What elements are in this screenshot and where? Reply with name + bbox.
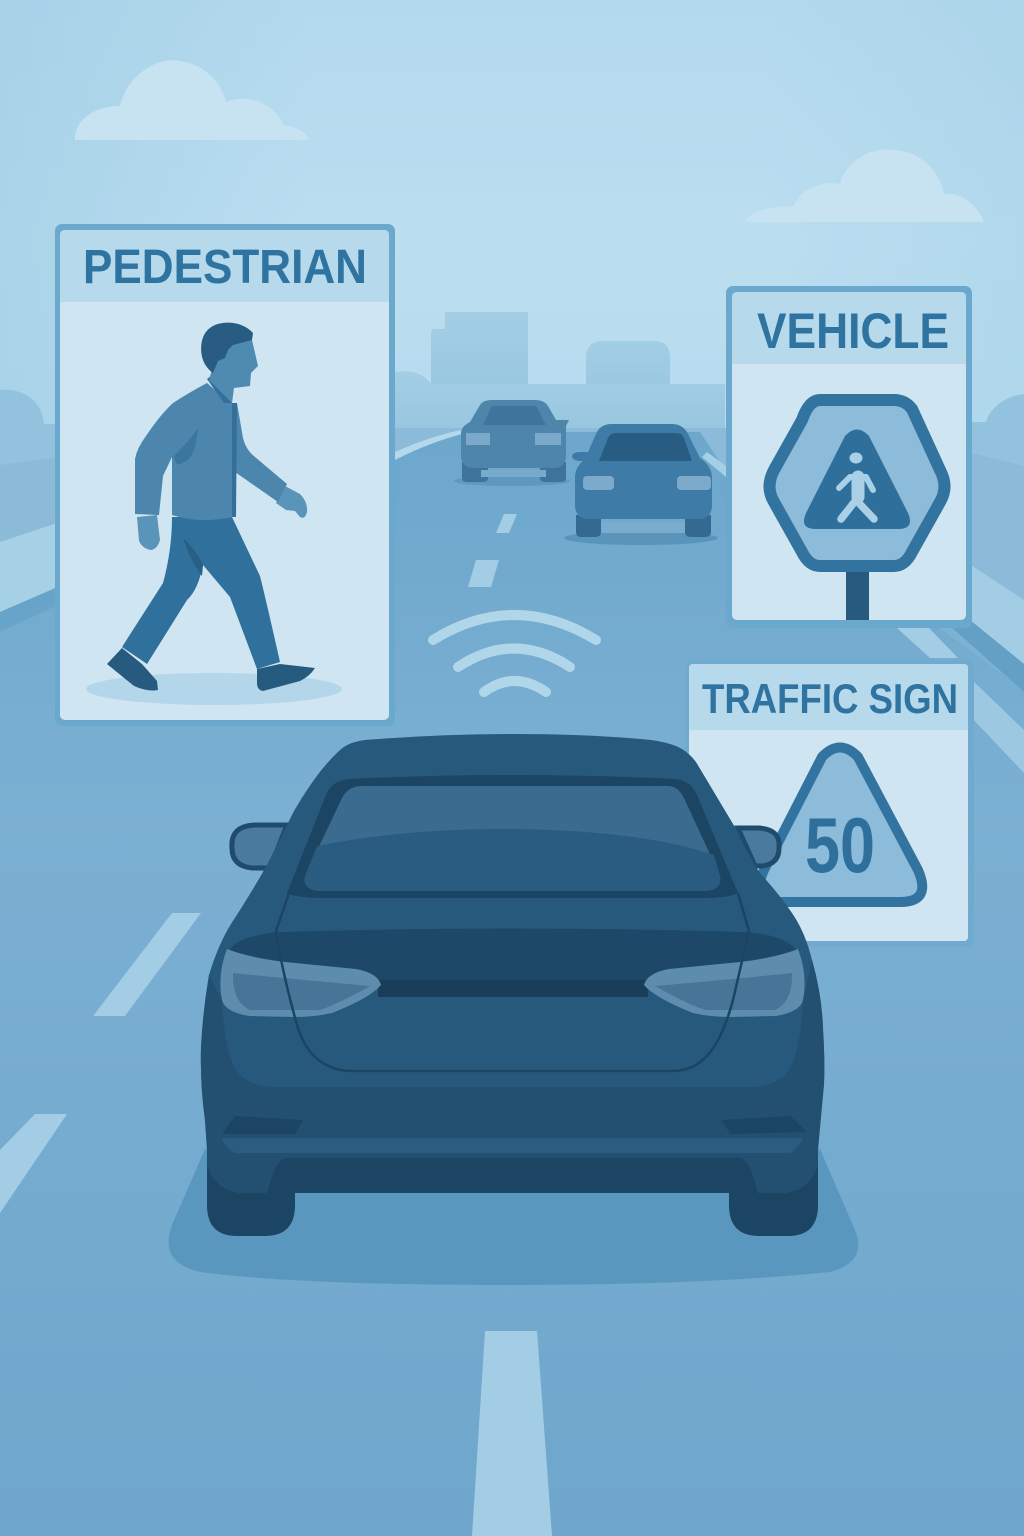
walking figure [839, 452, 874, 519]
car 2 body [575, 424, 712, 519]
right shoe [257, 664, 315, 691]
car 1 plate area [481, 470, 546, 477]
right roadside [960, 394, 1024, 600]
inner arc [484, 681, 546, 692]
left roadside [0, 390, 60, 612]
sign pole [846, 570, 869, 620]
right dark edge band [950, 620, 1024, 692]
left mirror [232, 825, 287, 868]
car 2 mirrors [572, 452, 592, 461]
figure legs [841, 500, 874, 519]
trunk outline [276, 893, 749, 1071]
far dash 2 [468, 560, 499, 587]
icon: speed limit sign [760, 748, 922, 902]
tail light inner [233, 973, 370, 1010]
left ground band [0, 457, 60, 545]
right reflector [722, 1116, 807, 1134]
lower body shade [201, 960, 824, 1193]
right hand [276, 486, 307, 518]
car 2 lights [583, 476, 614, 490]
warning triangle [804, 430, 910, 529]
car 2 shadow [564, 531, 718, 545]
car body [201, 734, 824, 1193]
right light shoulder [960, 558, 1024, 664]
right ground band [960, 450, 1024, 600]
triangle sign [760, 748, 922, 902]
car 1 shadow [454, 476, 570, 486]
heading: vehicle: VEHICLE [757, 303, 949, 359]
car 1 body [461, 400, 569, 468]
tail light outer [644, 949, 805, 1017]
heading: pedestrian: PEDESTRIAN [83, 241, 367, 294]
left road edge band [0, 586, 60, 632]
road surface [0, 432, 1024, 1536]
far left road curve [395, 429, 466, 460]
panel body [689, 664, 968, 941]
skyline base [395, 371, 725, 430]
distant ground band [395, 428, 727, 472]
right tail light [644, 949, 805, 1017]
spoiler [229, 928, 796, 997]
hexagon sign [770, 400, 944, 566]
pants [122, 517, 280, 669]
car 1 tires [462, 462, 566, 482]
distant car 1 [454, 400, 570, 486]
outer arc [433, 615, 596, 640]
wireless signal arcs [433, 615, 596, 692]
car 1 window [483, 406, 546, 425]
panel header [60, 230, 389, 302]
centre trim bar [378, 980, 648, 997]
sky background [0, 0, 1024, 480]
panel header [689, 664, 968, 730]
rear tires [207, 1140, 818, 1236]
panel border [726, 286, 972, 628]
jacket zip and collar [207, 375, 237, 517]
car 1 lights [466, 433, 561, 445]
panel: vehicle [726, 286, 972, 628]
far left dash [0, 1114, 67, 1213]
right hill [960, 394, 1024, 470]
car shadow [168, 1149, 858, 1285]
tail light inner [655, 973, 792, 1010]
left hill [0, 390, 60, 470]
window reflection [305, 829, 720, 891]
panel border [55, 224, 395, 726]
right mirror [738, 828, 779, 866]
centre bottom dash [472, 1331, 552, 1536]
icon: pedestrian crossing sign [770, 400, 944, 620]
lower bumper band [222, 1138, 803, 1153]
panel: traffic sign [685, 660, 974, 947]
right road dash [897, 628, 958, 658]
jacket [135, 383, 287, 520]
rear window frame [287, 775, 738, 898]
panel body [60, 230, 389, 720]
car 2 plate area [601, 522, 685, 533]
heading: traffic sign: TRAFFIC SIGN [702, 675, 958, 722]
rear window glass [305, 786, 720, 891]
panel header [732, 292, 966, 364]
figure arms [839, 477, 873, 490]
person figure [86, 323, 342, 705]
lane dashes [0, 514, 552, 1536]
middle arc [458, 648, 570, 667]
ego car [168, 734, 858, 1285]
cloud right [745, 149, 984, 222]
underarm shadow [173, 428, 198, 464]
sky edge shading [0, 0, 1024, 480]
car 2 window [599, 433, 692, 461]
lower bumper recess [267, 1158, 758, 1193]
figure head [850, 452, 862, 464]
distant skyline [395, 312, 725, 430]
pants crease [183, 538, 203, 576]
left hand [137, 515, 160, 550]
far right road stripe [702, 452, 726, 477]
panel border [685, 660, 974, 947]
figure torso [852, 477, 864, 497]
distant car 2 [564, 424, 718, 545]
near left dash [93, 913, 201, 1016]
left light shoulder [0, 522, 60, 612]
speed number: 50 [805, 801, 875, 889]
left reflector [222, 1116, 303, 1134]
left tail light [220, 949, 381, 1017]
ground shadow [86, 673, 342, 705]
car 2 tires [576, 515, 711, 537]
cloud left [75, 60, 309, 140]
neck and face [209, 340, 258, 403]
tail light outer [220, 949, 381, 1017]
panel: pedestrian [55, 224, 395, 726]
building block left [431, 312, 528, 400]
left shoe [107, 648, 158, 690]
building block right [586, 341, 670, 400]
hair [201, 323, 253, 373]
right lower road stripe [970, 678, 1024, 773]
panel body [732, 292, 966, 620]
far dash 1 [496, 514, 517, 533]
